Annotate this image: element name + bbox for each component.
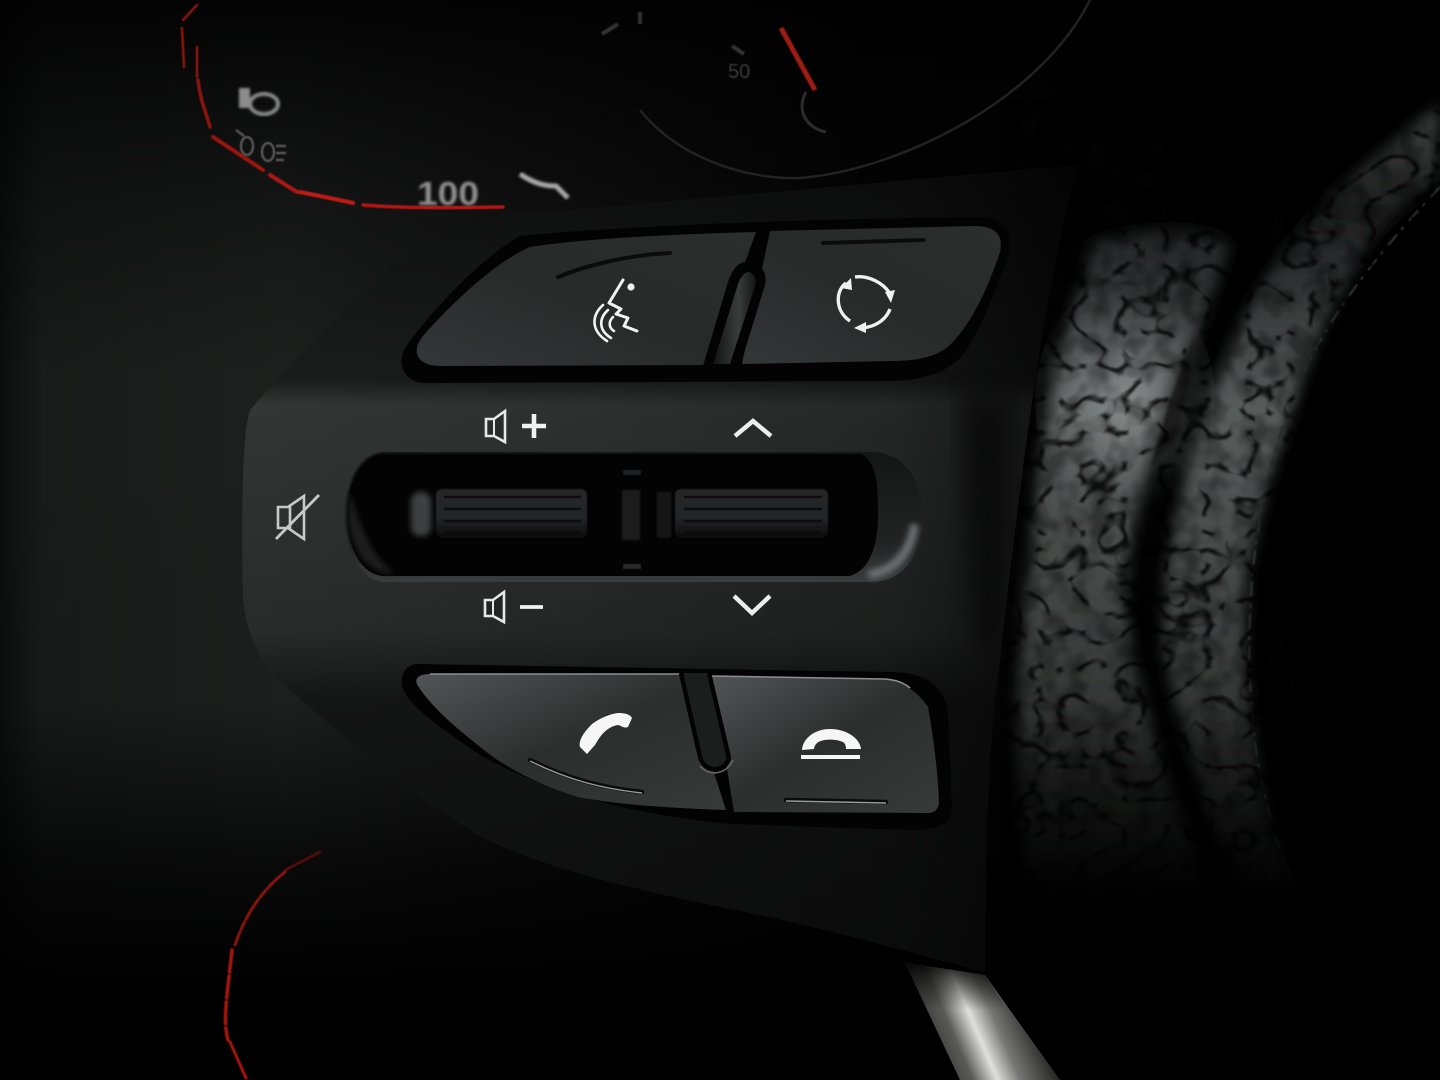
bottom button group: call and end [402,664,952,830]
mode button [742,226,1001,364]
icon: phone call [580,713,632,754]
wheel rim edge [1249,187,1440,950]
metal stalk [905,963,1060,1080]
top button group: voice and mode [402,217,1010,383]
voice button marker [558,253,670,277]
right roller: seek [675,489,828,538]
roller center divider [622,470,671,569]
icon: voice recognition [594,280,637,341]
wheel lower fade [1000,700,1440,1080]
leather highlight [1035,280,1215,520]
right grip band [1164,105,1440,1000]
lamp icon [239,88,278,114]
roller switch recess [345,452,922,582]
lower red ring [225,852,320,1078]
icon: chevron up [735,421,771,436]
instrument cluster: right gauge with needle: 50 [728,61,750,83]
end button [712,676,939,813]
left roller: volume [411,489,587,538]
beam icons [236,130,286,161]
top button recess [402,217,1010,383]
instrument cluster: right gauge with needle [602,0,1090,178]
icon: phone end [801,729,861,759]
recess lip [345,452,922,582]
split between buttons [751,232,765,264]
icon: chevron down [734,596,770,613]
speed label: 100 [417,175,479,212]
left grip band [1019,230,1235,1000]
split between buttons [680,673,729,769]
icon: volume down [485,592,543,622]
mode button marker [823,240,924,243]
voice button [417,232,756,366]
call button marker [530,760,642,792]
control panel housing [240,160,1090,975]
groove facet [1150,335,1195,470]
leather creases [1000,100,1440,1020]
end button marker [786,800,886,802]
leather mottling [1000,100,1440,1020]
icon: mute [276,495,319,539]
instrument cluster: left gauge with red ring [182,5,568,212]
icon: volume up [486,411,546,442]
call button [416,674,726,810]
gauge tick [520,174,568,198]
icon: mode cycle [838,277,895,333]
leather steering wheel [1000,100,1440,1080]
